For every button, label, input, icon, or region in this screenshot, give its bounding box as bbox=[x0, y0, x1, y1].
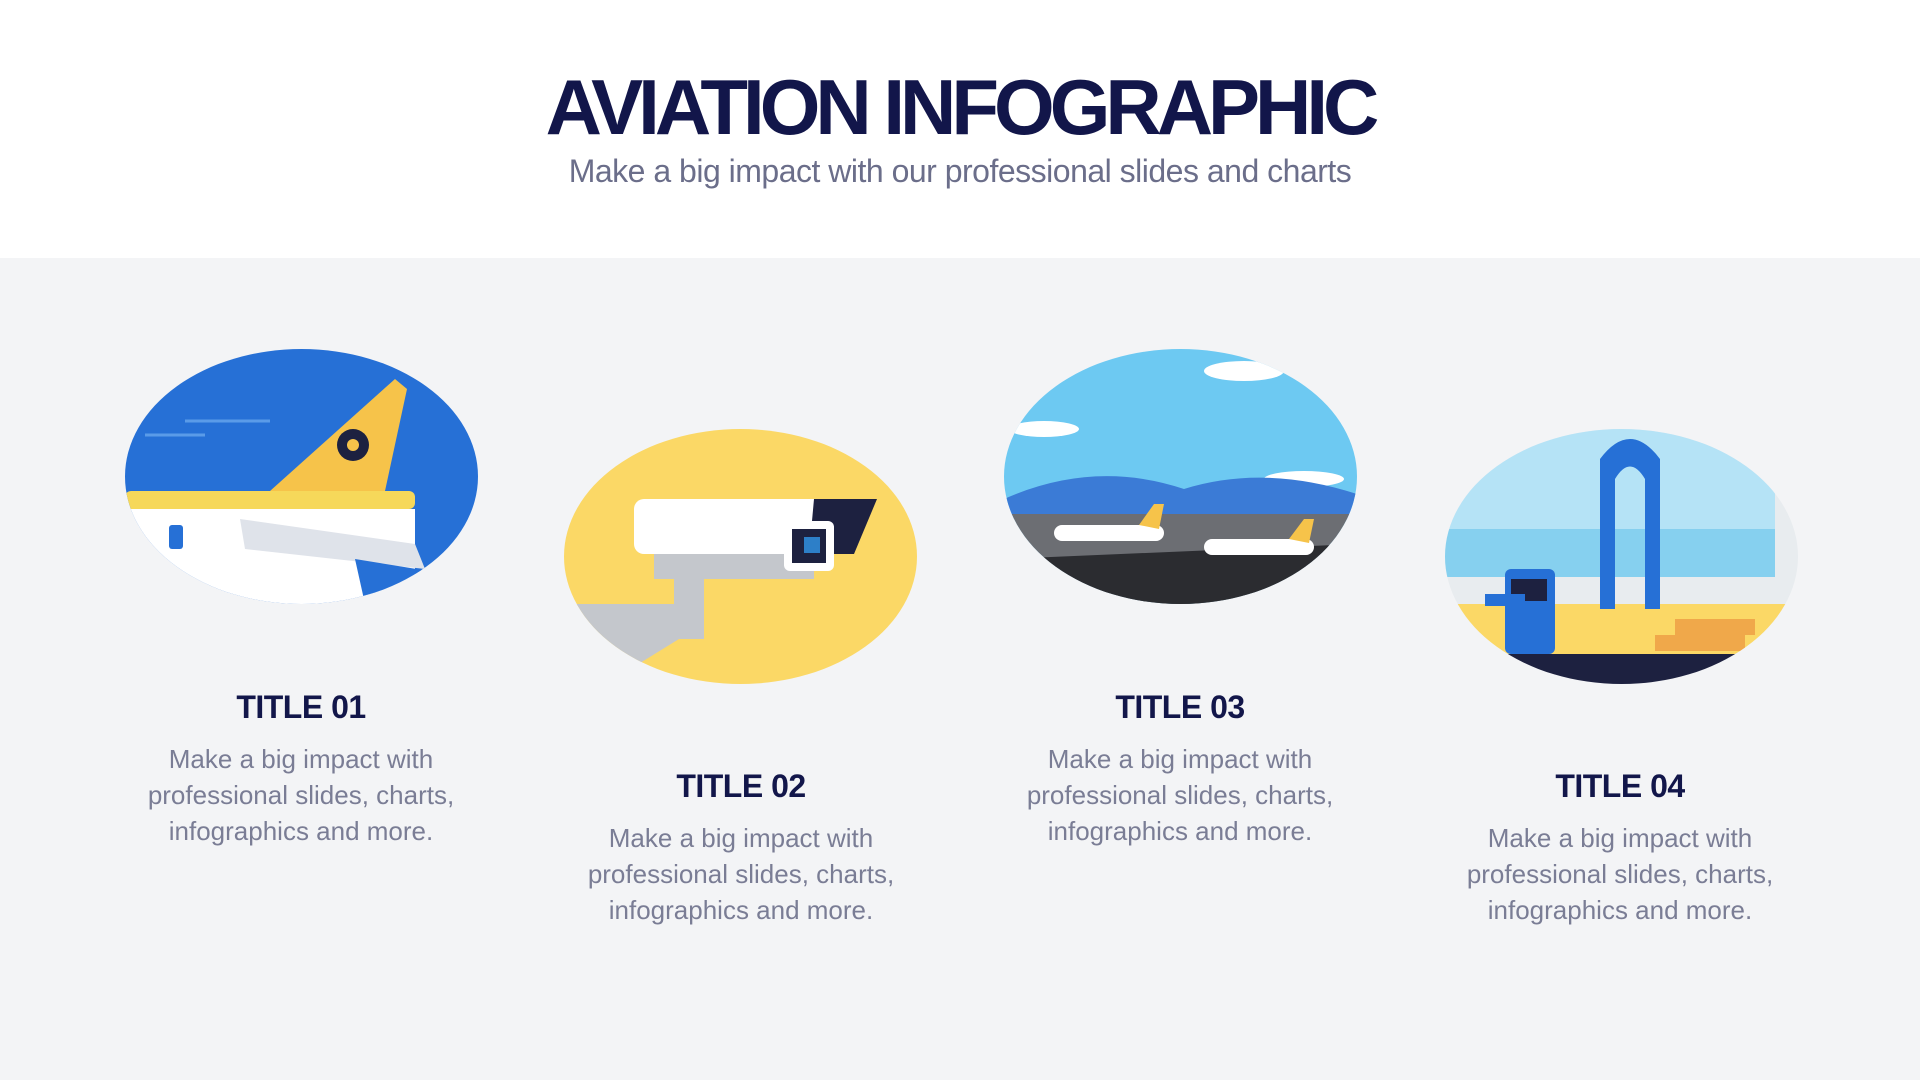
illustration 2: security camera bbox=[564, 429, 917, 684]
card 3: TITLE 03 bbox=[1115, 689, 1245, 725]
card 2: TITLE 02 bbox=[676, 768, 806, 804]
subtitle: Make a big impact with our professional slides and charts bbox=[569, 153, 1351, 189]
card 1 bbox=[148, 689, 454, 846]
card 2: professional slides, charts, bbox=[588, 859, 894, 889]
card 4: infographics and more. bbox=[1488, 895, 1752, 925]
card 4: TITLE 04 bbox=[1555, 768, 1685, 804]
illustration 3: airport runway bbox=[1004, 349, 1357, 604]
card 2: infographics and more. bbox=[609, 895, 873, 925]
card 1: Make a big impact with bbox=[169, 744, 433, 774]
card 1: professional slides, charts, bbox=[148, 780, 454, 810]
card 2: Make a big impact with bbox=[609, 823, 873, 853]
card 1: TITLE 01 bbox=[236, 689, 366, 725]
card 2 bbox=[588, 768, 894, 925]
card 3: infographics and more. bbox=[1048, 816, 1312, 846]
title: AVIATION INFOGRAPHIC bbox=[546, 63, 1374, 151]
card 3: Make a big impact with bbox=[1048, 744, 1312, 774]
card 4 bbox=[1467, 768, 1773, 925]
card 3 bbox=[1027, 689, 1333, 846]
card 4: Make a big impact with bbox=[1488, 823, 1752, 853]
card 4: professional slides, charts, bbox=[1467, 859, 1773, 889]
illustration 1: airplane tail bbox=[125, 349, 478, 604]
illustration 4: airport gate bbox=[1445, 429, 1798, 684]
card 3: professional slides, charts, bbox=[1027, 780, 1333, 810]
card 1: infographics and more. bbox=[169, 816, 433, 846]
